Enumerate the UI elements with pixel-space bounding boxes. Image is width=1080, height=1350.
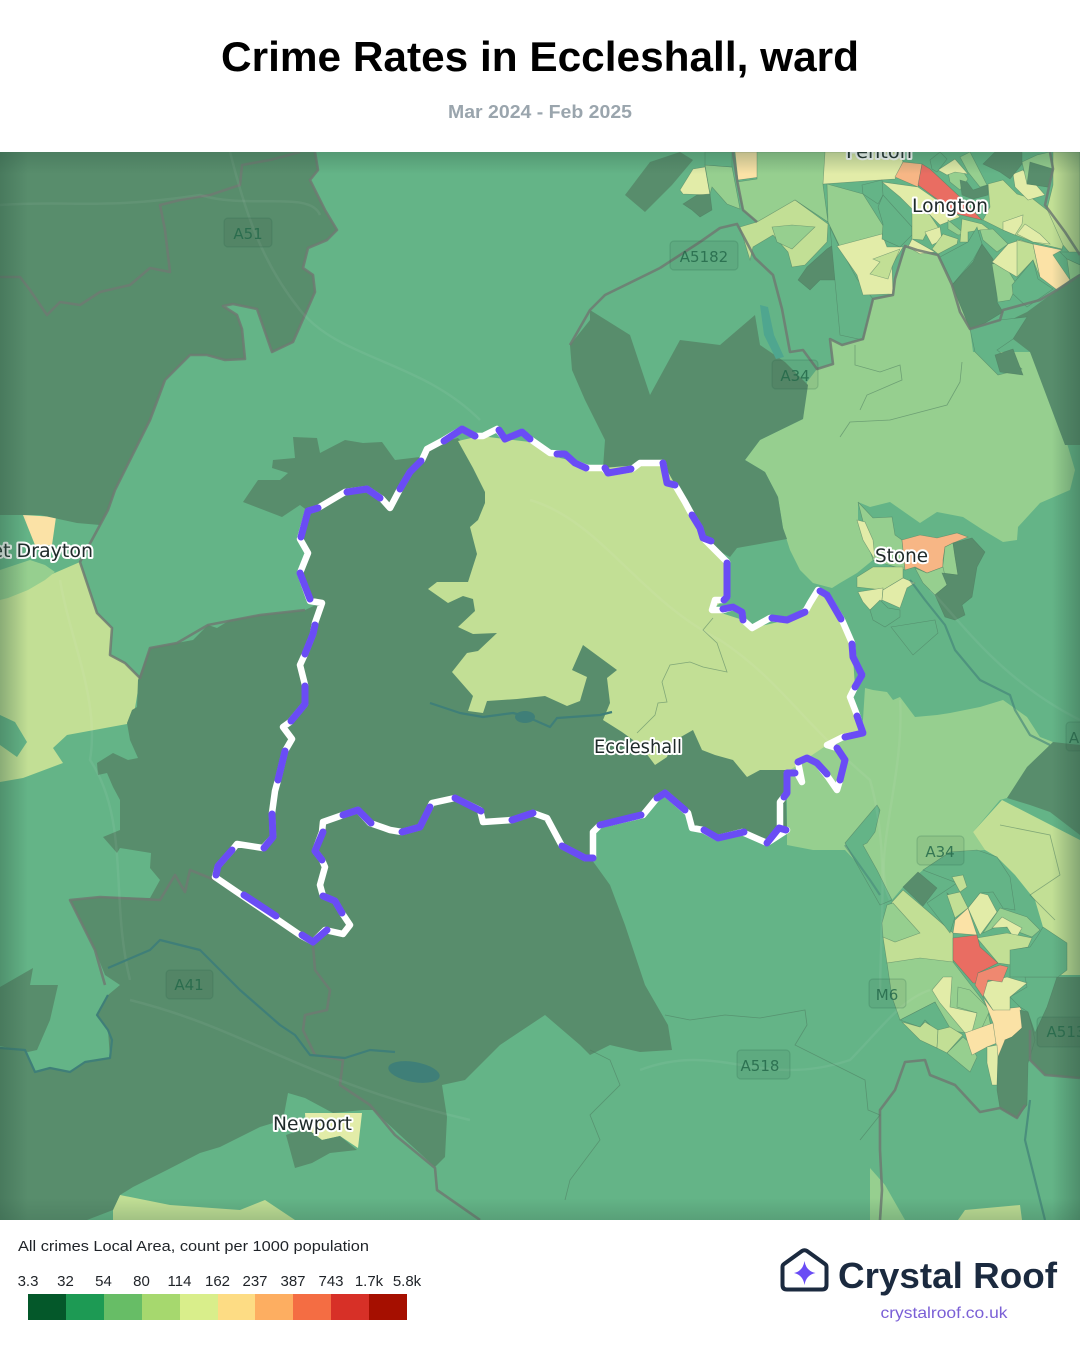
icon: house with star (782, 1250, 826, 1290)
legend scale labels: 743 (318, 1273, 344, 1290)
small pale patch beside Newport (305, 1113, 362, 1148)
legend scale labels (18, 1273, 422, 1290)
road label: M6 (869, 979, 906, 1008)
light green region: north-east of the ward (745, 245, 1075, 588)
website: crystalroof.co.uk (880, 1305, 1009, 1322)
low-crime dark patches: east edge (1007, 742, 1080, 835)
road label: A41 (166, 970, 213, 999)
road label: A51: A51 (233, 225, 263, 243)
road label: A34 south (917, 836, 964, 865)
low-crime dark region: north-west (0, 152, 337, 525)
road label: A51 (224, 218, 272, 247)
place label: Longton: Longton (912, 195, 988, 217)
pale region: Market Drayton south (0, 562, 140, 782)
legend scale labels: 1.7k (355, 1273, 384, 1290)
legend scale labels: 162 (205, 1273, 230, 1290)
mid patch: Market Drayton west (0, 715, 27, 757)
ward boundary: purple dashes (216, 429, 863, 942)
cream patch: Market Drayton (23, 515, 56, 545)
pale region east of Stafford (973, 800, 1080, 975)
ward tract: pale high-value area (428, 436, 863, 777)
road label: A513 (1037, 1017, 1080, 1047)
legend scale labels: 237 (242, 1273, 268, 1290)
legend scale labels: 54 (95, 1273, 112, 1290)
low-crime dark region: north of the ward (570, 310, 808, 557)
road label: M6: M6 (876, 986, 898, 1004)
road label: edge A (1066, 722, 1080, 751)
wordmark: Crystal Roof (838, 1255, 1058, 1296)
pale strip: bottom right (958, 1205, 1022, 1220)
light green region: south-east of the ward (787, 688, 1053, 900)
logo: Crystal Roof (782, 1250, 1058, 1322)
map edge vignette (0, 152, 1080, 1220)
road label: A34 north (772, 360, 818, 389)
legend colour bar (28, 1294, 407, 1320)
urban cells: Stone (857, 502, 985, 655)
road label: A41: A41 (174, 976, 204, 994)
light patch: Market Drayton centre (0, 560, 55, 600)
legend scale labels: 387 (280, 1273, 306, 1290)
district boundaries (0, 152, 1080, 1220)
place label: Newport: Newport (273, 1113, 352, 1135)
legend scale labels: 5.8k (393, 1273, 422, 1290)
ward boundary: white base (215, 429, 863, 942)
legend (18, 1238, 422, 1320)
legend scale labels: 3.3 (18, 1273, 38, 1290)
Newport dark cells (286, 1128, 357, 1168)
road label: A518 (737, 1050, 790, 1079)
road label: edge A: A (1069, 729, 1080, 747)
legend scale labels: 32 (57, 1273, 74, 1290)
rivers and water (0, 305, 1050, 1220)
legend scale labels: 114 (168, 1273, 191, 1290)
low-crime dark patch: far west (0, 968, 58, 1052)
legend scale labels: 80 (133, 1273, 150, 1290)
title: Crime Rates in Eccleshall, ward (221, 33, 859, 80)
low-crime dark region: central and south-west (0, 437, 787, 1220)
subtitle: date range: Mar 2024 - Feb 2025 (448, 102, 632, 122)
road label: A5182 (670, 241, 738, 270)
light strip: bottom right (870, 1168, 905, 1220)
road label: A5182: A5182 (680, 248, 728, 266)
thin tract lines (565, 345, 1060, 1200)
place label: Stone: Stone (875, 545, 928, 567)
pale strip: bottom left (113, 1195, 295, 1220)
road label: A518: A518 (741, 1057, 779, 1075)
urban cells: Longton (680, 152, 1080, 375)
choropleth map (0, 141, 1080, 1220)
legend title: All crimes Local Area, count per 1000 population (18, 1238, 369, 1255)
urban cells: Stafford (845, 805, 1067, 1118)
place label: Fenton: Fenton (846, 141, 912, 163)
faint roads (0, 152, 1080, 1120)
road label: A34 north: A34 (780, 367, 810, 385)
road label: A34 south: A34 (925, 843, 955, 861)
place label: Eccleshall: Eccleshall (594, 736, 682, 758)
